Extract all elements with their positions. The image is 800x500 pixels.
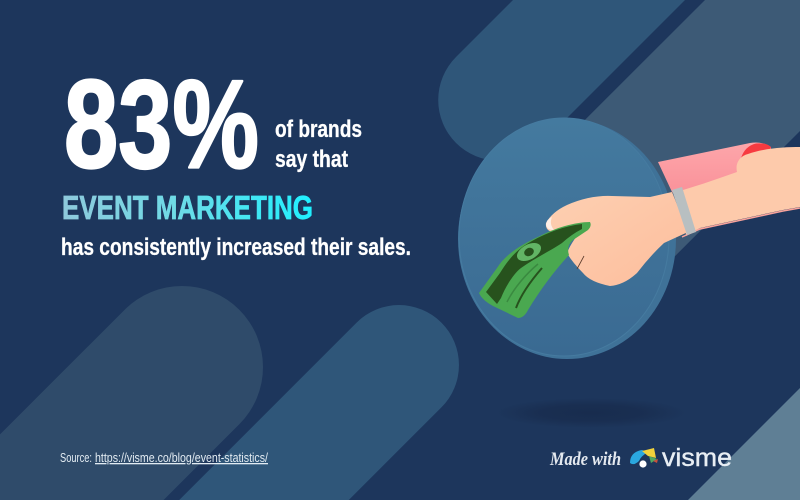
sleeve bbox=[658, 142, 772, 205]
background corner triangle bbox=[688, 388, 800, 500]
text: of brands say that bbox=[275, 116, 362, 173]
disc back rim bbox=[458, 119, 676, 359]
source line: https://visme.co/blog/event-statistics/ bbox=[95, 450, 268, 465]
branding: made with visme bbox=[549, 444, 732, 472]
arm bbox=[683, 147, 800, 236]
background stripe: top capsule bbox=[438, 0, 685, 161]
bracelet bbox=[672, 187, 696, 235]
text: of brands say that: say that bbox=[275, 146, 348, 173]
finger crease bbox=[577, 256, 584, 269]
text: sales statement: has consistently increased their sales. bbox=[61, 234, 411, 261]
illustration: disc with hand holding money bbox=[458, 118, 800, 359]
made with: Made with bbox=[549, 449, 621, 470]
icon: visme logo bbox=[630, 448, 658, 468]
background stripe: bottom centre capsule bbox=[179, 305, 459, 500]
money bbox=[479, 222, 591, 318]
arm lower pink edge bbox=[682, 208, 800, 237]
thumb nail bbox=[546, 217, 554, 230]
background stripe: top right capsule bbox=[520, 0, 800, 298]
background stripe: bottom left capsule bbox=[0, 286, 263, 500]
text: of brands say that: of brands bbox=[275, 116, 362, 143]
highlighted heading: EVENT MARKETING bbox=[62, 189, 313, 226]
visme wordmark: visme bbox=[662, 444, 732, 472]
hand bbox=[546, 192, 688, 286]
shadow under disc bbox=[496, 398, 686, 428]
disc front face bbox=[459, 118, 669, 356]
headline statistic: 83% bbox=[64, 56, 259, 194]
source line: Source: bbox=[60, 450, 92, 465]
